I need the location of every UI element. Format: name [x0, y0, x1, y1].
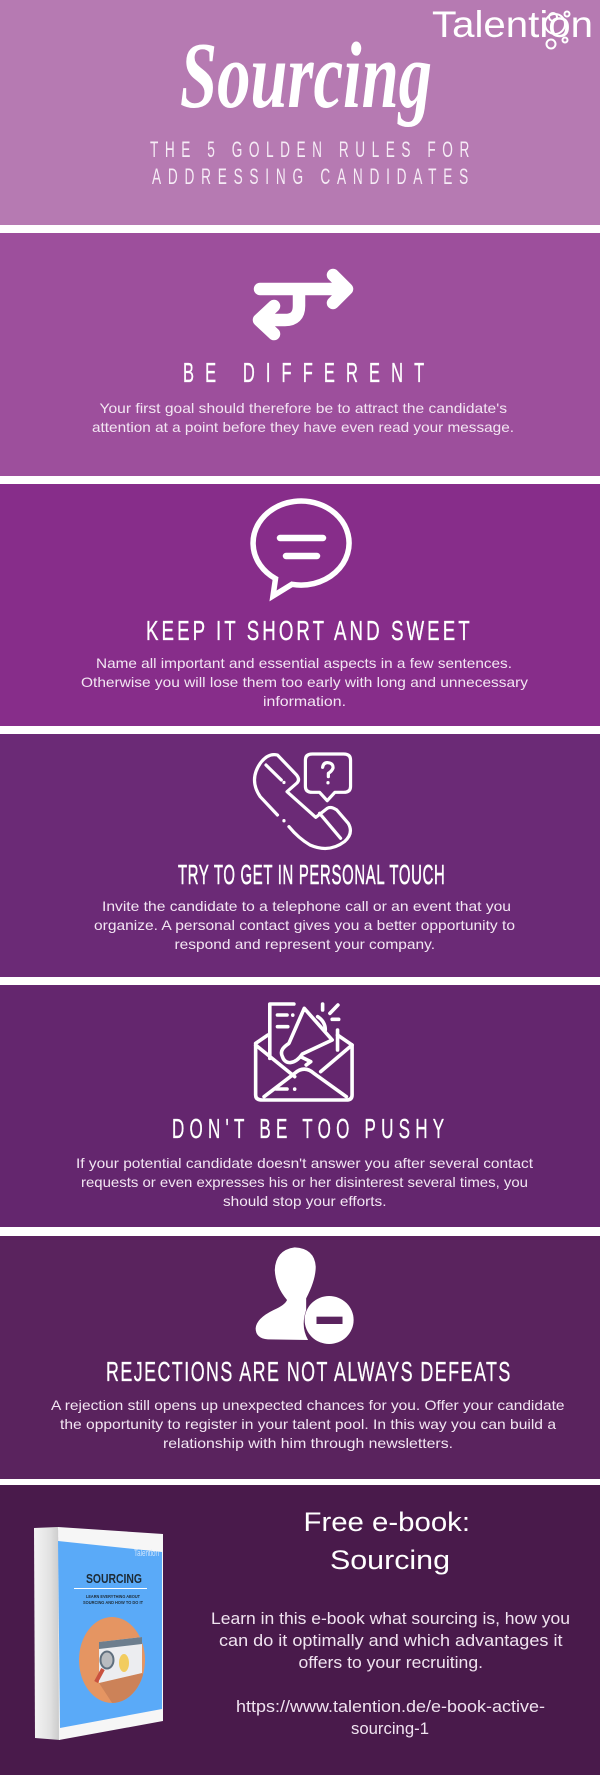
icon: speech bubble — [253, 501, 349, 596]
text block — [76, 1155, 533, 1209]
logo: Talention: Talention — [432, 4, 593, 45]
text block: Name all important and essential aspects in a few sentences. — [96, 655, 512, 671]
text block — [92, 400, 514, 435]
heading: DON'T BE TOO PUSHY — [172, 1113, 444, 1144]
text block: description and link: sourcing-1 — [351, 1720, 429, 1738]
heading: free e-book: Free e-book: — [304, 1507, 470, 1537]
text block: description and link: can do it optimally and which advantages it — [219, 1632, 563, 1650]
panel: keep it short and sweet — [0, 484, 600, 726]
e-book cover: Talention — [134, 1548, 159, 1558]
text block: description and link — [211, 1610, 570, 1738]
heading: BE DIFFERENT — [183, 357, 424, 388]
e-book cover: LEARN EVERYTHING ABOUT — [86, 1594, 140, 1599]
text block: Invite the candidate to a telephone call or an event that you — [102, 898, 511, 914]
text block: Otherwise you will lose them too early with long and unnecessary — [81, 674, 528, 690]
text block: requests or even expresses his or her disinterest several times, you — [81, 1174, 528, 1190]
text block: description and link: offers to your recruiting. — [298, 1654, 483, 1672]
e-book cover — [34, 1527, 163, 1740]
text block: should stop your efforts. — [223, 1193, 386, 1209]
icon: phone with question bubble — [254, 754, 351, 848]
panel: header — [0, 0, 600, 225]
heading: REJECTIONS ARE NOT ALWAYS DEFEATS — [106, 1356, 510, 1387]
e-book cover: SOURCING — [86, 1571, 142, 1586]
e-book cover: SOURCING AND HOW TO DO IT — [83, 1600, 143, 1605]
text block: description and link: Learn in this e-book what sourcing is, how you — [211, 1610, 570, 1628]
text block: If your potential candidate doesn't answer you after several contact — [76, 1155, 533, 1171]
text block: information. — [263, 693, 346, 709]
panel: don't be too pushy — [0, 985, 600, 1227]
text block — [81, 655, 528, 709]
text block — [94, 898, 515, 952]
text block: respond and represent your company. — [174, 936, 435, 952]
heading: free e-book — [304, 1507, 470, 1575]
text block: organize. A personal contact gives you a better opportunity to — [94, 917, 515, 933]
panel: be different — [0, 233, 600, 476]
icon: envelope with megaphone — [256, 1004, 352, 1100]
text block: relationship with him through newsletters. — [163, 1435, 453, 1451]
subtitle: ADDRESSING CANDIDATES — [152, 164, 468, 189]
panel: personal touch — [0, 734, 600, 977]
heading: KEEP IT SHORT AND SWEET — [146, 615, 470, 646]
subtitle: THE 5 GOLDEN RULES FOR — [150, 137, 469, 162]
icon: crossing arrows — [259, 275, 347, 334]
text block — [51, 1397, 565, 1451]
text block: description and link: https://www.talention.de/e-book-active- — [236, 1698, 545, 1716]
text block: the opportunity to register in your talent pool. In this way you can build a — [60, 1416, 556, 1432]
panel: rejections — [0, 1236, 600, 1479]
text block: Your first goal should therefore be to attract the candidate's — [100, 400, 507, 416]
icon: person with minus — [256, 1247, 354, 1344]
panel: free e-book — [0, 1485, 600, 1775]
subtitle — [150, 137, 469, 189]
title: Sourcing: Sourcing — [180, 24, 432, 128]
heading: TRY TO GET IN PERSONAL TOUCH — [178, 859, 445, 890]
text block: A rejection still opens up unexpected chances for you. Offer your candidate — [51, 1397, 565, 1413]
text block: attention at a point before they have even read your message. — [92, 419, 514, 435]
heading: free e-book: Sourcing — [330, 1545, 450, 1575]
